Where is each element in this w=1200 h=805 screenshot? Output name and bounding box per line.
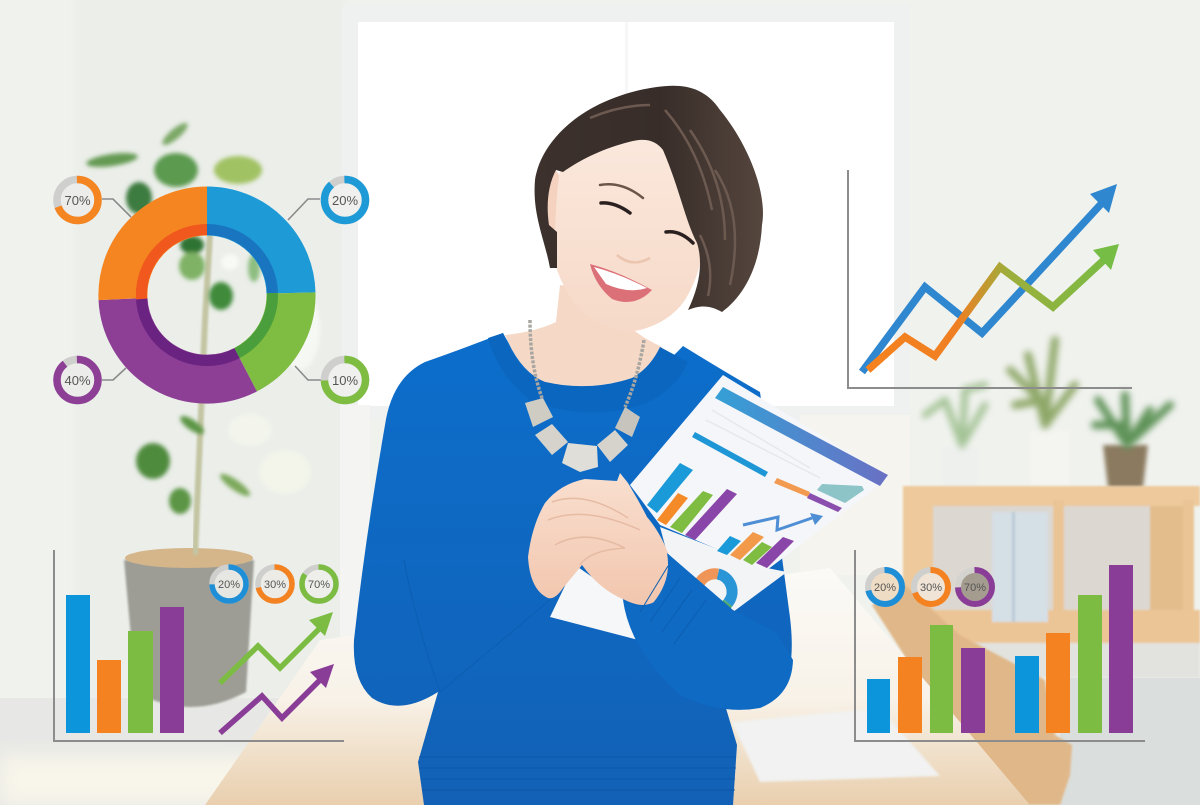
badge: 40% <box>57 360 98 400</box>
axes <box>855 550 1145 741</box>
blue arrow head <box>1090 184 1117 213</box>
background: wooden chair <box>872 585 1072 805</box>
bar chart: bottom right <box>855 550 1145 741</box>
background: large potted plant <box>85 120 320 707</box>
page blue rule <box>692 432 768 477</box>
finger lines <box>548 498 640 565</box>
page orange rule <box>774 478 810 497</box>
hair <box>535 86 763 312</box>
page header band <box>715 387 888 486</box>
badge: 10% <box>324 360 366 400</box>
purple arrow <box>220 664 334 733</box>
background: wooden table <box>205 568 1030 805</box>
neck and chest skin <box>505 285 662 386</box>
page purple rule <box>807 493 842 512</box>
page mini bars <box>817 484 864 503</box>
badge: 20%: 20% <box>874 582 896 594</box>
smile <box>590 264 652 302</box>
background: papers on table <box>732 708 940 782</box>
sweater body <box>354 333 792 805</box>
plant foliage <box>925 340 1170 445</box>
green arrow head <box>1093 244 1119 270</box>
badge: 30%: 30% <box>264 579 286 591</box>
green arrow <box>220 612 333 683</box>
hands <box>528 473 669 605</box>
badge: 20%: 20% <box>218 579 240 591</box>
badge: 30% <box>914 570 948 604</box>
badge: 30%: 30% <box>920 582 942 594</box>
nose <box>617 255 650 262</box>
badge: 20%: 20% <box>332 193 358 208</box>
bars <box>867 565 1133 733</box>
line chart: top right <box>848 170 1132 388</box>
badge: 30% <box>258 567 292 601</box>
bars <box>66 595 184 733</box>
connector lines <box>102 199 322 380</box>
background: floor right <box>1060 678 1200 805</box>
page arrow <box>743 513 823 530</box>
badge: 70% <box>958 570 992 604</box>
back document corner <box>550 565 650 643</box>
sweater collar <box>488 333 688 412</box>
badge: 70%: 70% <box>308 579 330 591</box>
badge: 70% <box>302 567 336 601</box>
axes <box>848 170 1132 388</box>
donut chart outer ring <box>123 211 291 379</box>
necklace <box>525 320 644 472</box>
ear <box>545 170 563 230</box>
badge: 10%: 10% <box>332 373 358 388</box>
background: wooden shelf <box>903 486 1200 678</box>
donut chart inner ring <box>141 229 273 361</box>
badge: 40%: 40% <box>64 373 91 388</box>
hair highlights <box>590 105 735 296</box>
stem <box>195 200 212 555</box>
page text lines <box>706 410 820 478</box>
front document page <box>630 375 890 570</box>
page bar chart large <box>647 463 737 540</box>
soil <box>125 548 253 568</box>
eyes <box>601 203 693 243</box>
sleeve ribbing <box>640 566 706 644</box>
axes <box>54 550 344 741</box>
badge: 20% <box>868 570 902 604</box>
donut chart with badges <box>57 180 366 400</box>
face <box>555 139 702 331</box>
foliage <box>85 120 320 514</box>
badge: 20% <box>212 567 246 601</box>
orange to green rising line <box>868 258 1106 370</box>
small donut on page <box>699 574 732 610</box>
bar chart: bottom left <box>54 550 344 741</box>
background: small plants <box>925 340 1170 490</box>
planter <box>124 560 254 707</box>
plant pots <box>943 430 1148 490</box>
blue rising line <box>862 203 1102 372</box>
left sleeve fold <box>404 560 550 692</box>
badge: 70%: 70% <box>64 193 91 208</box>
badge: 20% <box>324 180 366 220</box>
lower document page <box>660 527 787 612</box>
badge: 70%: 70% <box>964 582 986 594</box>
woman <box>354 86 890 805</box>
page bar chart small <box>717 532 794 568</box>
eyebrows <box>600 184 643 198</box>
right sleeve <box>623 553 793 710</box>
badge: 70% <box>57 180 98 220</box>
sweater hem ribbing <box>419 757 736 790</box>
